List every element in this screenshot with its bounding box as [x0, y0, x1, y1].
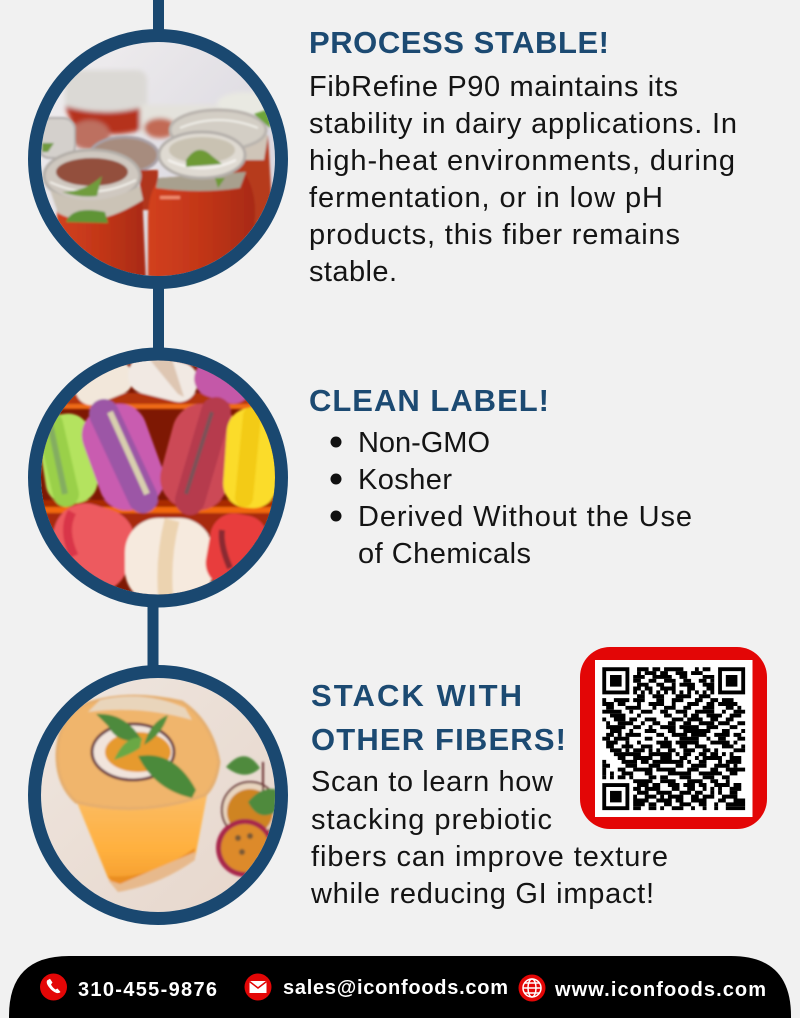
QR code on red card [580, 647, 767, 829]
bullet list: clean label: Derived Without the Use [358, 501, 692, 533]
heading: stack with other fibers: STACK WITH [311, 678, 522, 713]
text block: stacking fibers [310, 766, 668, 910]
text block: process stable: fermentation, or in low pH [309, 182, 663, 214]
bullet list: clean label: of Chemicals [358, 538, 531, 570]
text block: process stable: products, this fiber remains [309, 219, 680, 251]
text block: process stable: stability in dairy applications. In [309, 108, 737, 140]
heading: clean label: CLEAN LABEL! [309, 383, 549, 418]
bullet list: clean label [330, 427, 692, 570]
website: www.iconfoods.com [554, 979, 766, 1001]
text block: process stable: high-heat environments, during [309, 145, 735, 177]
text block: process stable: FibRefine P90 maintains its [309, 71, 678, 103]
ring [34, 354, 282, 601]
heading: stack with other fibers [311, 678, 566, 757]
text block: process stable: stable. [309, 256, 397, 288]
text block: stacking fibers: fibers can improve texture [311, 841, 668, 873]
photo: passion fruit drink [34, 672, 282, 918]
ring [34, 672, 282, 918]
timeline connector lines [148, 0, 164, 670]
text block: process stable [309, 71, 737, 288]
photo: jars of tomato sauce [34, 36, 282, 282]
bullet list: clean label: Kosher [358, 464, 452, 496]
email address: sales@iconfoods.com [283, 977, 508, 999]
heading: process stable: PROCESS STABLE! [309, 25, 609, 60]
ring [34, 36, 282, 282]
footer contact bar [9, 956, 791, 1018]
text block: stacking fibers: while reducing GI impact! [310, 878, 654, 910]
phone number: 310-455-9876 [78, 979, 217, 1001]
left small jar [38, 118, 75, 158]
icon: globe [518, 974, 546, 1002]
photo: macarons [34, 350, 282, 604]
text block: stacking fibers: stacking prebiotic [311, 804, 552, 836]
bullet list: clean label: Non-GMO [358, 427, 490, 459]
text block: stacking fibers: Scan to learn how [311, 766, 554, 798]
heading: stack with other fibers: OTHER FIBERS! [311, 722, 566, 757]
icon: email [244, 974, 272, 1000]
icon: phone [40, 974, 67, 1000]
